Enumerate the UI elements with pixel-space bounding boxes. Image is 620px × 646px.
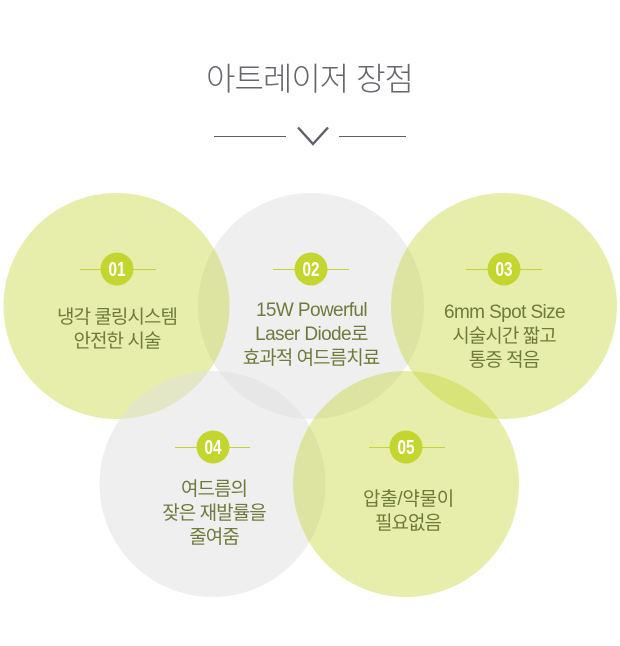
circle 1 background xyxy=(4,193,230,419)
item 01 xyxy=(57,252,177,352)
number badge 04: 04 xyxy=(204,437,222,459)
number badge 01: 01 xyxy=(108,259,126,281)
title divider with chevron xyxy=(214,128,406,144)
text 04: 여드름의 xyxy=(181,478,247,500)
number badge 03: 03 xyxy=(496,259,512,281)
text 01: 안전한 시술 xyxy=(74,330,161,352)
text 03: 6mm Spot Size xyxy=(444,302,565,323)
text 05: 압출/약물이 xyxy=(363,488,454,510)
title: 아트레이저 장점 xyxy=(206,61,413,97)
text 02: Laser Diode로 xyxy=(255,324,368,345)
item 05 xyxy=(363,430,454,534)
text 02: 15W Powerful xyxy=(256,300,367,321)
text 04: 줄여줌 xyxy=(189,526,239,548)
number badge 05: 05 xyxy=(398,437,414,459)
circle 4 background xyxy=(100,371,326,597)
text 04: 잦은 재발률을 xyxy=(162,502,266,524)
item 02 xyxy=(243,252,380,369)
text 01: 냉각 쿨링시스템 xyxy=(57,306,177,328)
text 02: 효과적 여드름치료 xyxy=(243,347,380,369)
text 05: 필요없음 xyxy=(375,512,442,534)
item 04 xyxy=(162,430,266,548)
circle 5 background xyxy=(293,371,519,597)
text 03: 통증 적음 xyxy=(469,349,540,371)
text 03: 시술시간 짧고 xyxy=(452,325,556,347)
icon: chevron down xyxy=(298,128,328,144)
number badge 02: 02 xyxy=(302,259,320,281)
circle 3 background xyxy=(391,193,617,419)
item 03 xyxy=(444,252,565,371)
circle 2 background xyxy=(198,193,424,419)
